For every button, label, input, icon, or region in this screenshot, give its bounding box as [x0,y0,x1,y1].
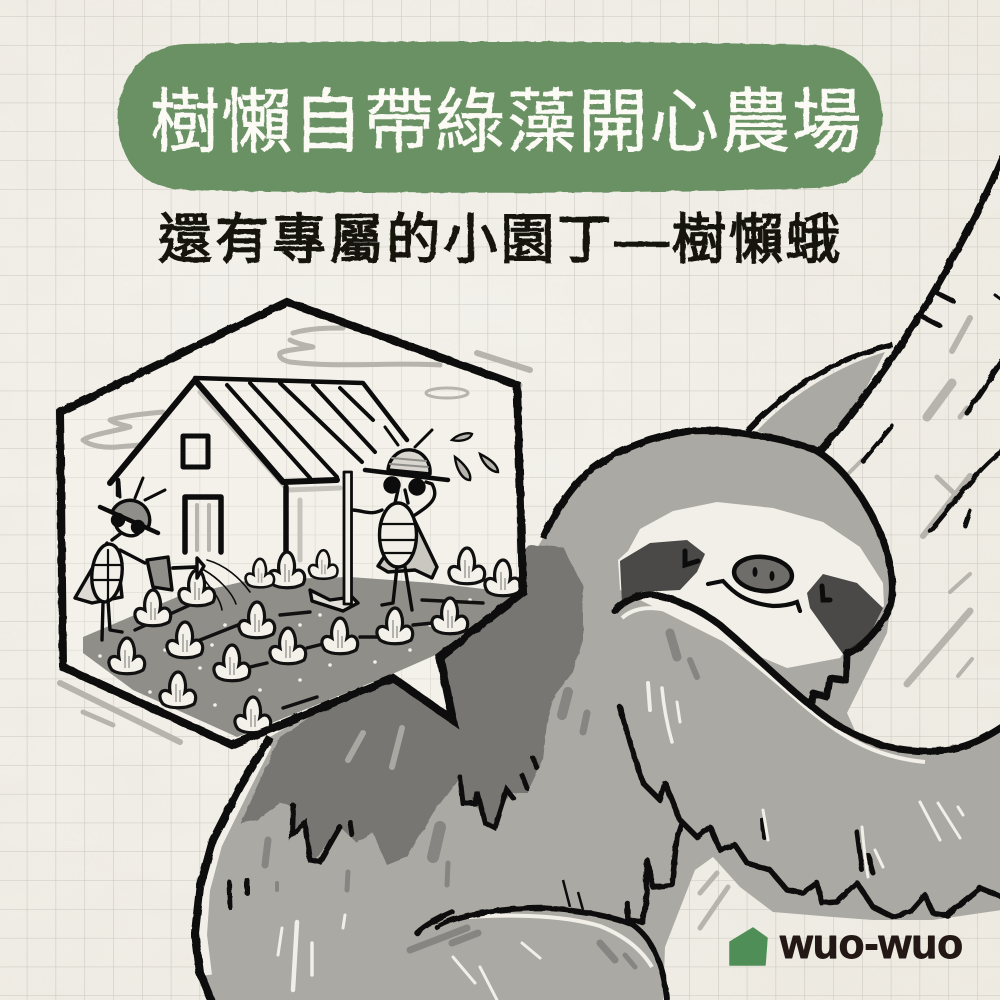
brand logo [730,920,963,967]
subtitle: 還有專屬的小園丁—樹懶蛾 [158,210,840,270]
barn window [183,436,208,467]
light strokes on the patch [348,728,402,767]
speech bubble panel: moth farm [40,290,540,760]
panel outline [60,302,523,745]
hoe [310,472,358,611]
left moth with watering can [75,478,250,640]
eye patches and eyes [620,540,883,654]
head outline [543,431,892,703]
green banner shape [118,41,882,193]
panel fill [60,302,523,745]
fur marks [229,633,963,1000]
icon: green house [730,928,767,965]
dark spots [265,633,697,967]
nose [732,554,794,594]
sweat drops [452,433,498,480]
title banner [118,41,882,193]
title text: 樹懶自帶綠藻開心農場 [150,83,862,161]
light edge along the back [203,745,268,975]
highlight under arm top [622,608,925,762]
mouth [708,581,800,611]
body outline [195,737,270,1000]
panel contents [64,306,520,739]
barn door [185,497,221,552]
white hair highlights [278,683,963,1000]
brand wordmark: wuo-wuo [779,920,963,967]
face mask [618,502,884,668]
field [83,577,517,737]
front arm outline [615,594,1000,922]
dark algae patch on back [240,545,583,865]
ear / far shoulder [747,345,893,449]
sloth body and arm fill [195,431,1000,1000]
crops [109,548,521,733]
clouds [83,328,468,447]
black fur tips on the patch [229,758,873,907]
barn [110,378,407,560]
sloth [195,158,1000,1000]
background motion strokes [60,318,972,928]
back leg [417,880,667,1000]
upper arm outline reaching to branch [820,158,1000,531]
right moth with hoe [310,427,448,611]
